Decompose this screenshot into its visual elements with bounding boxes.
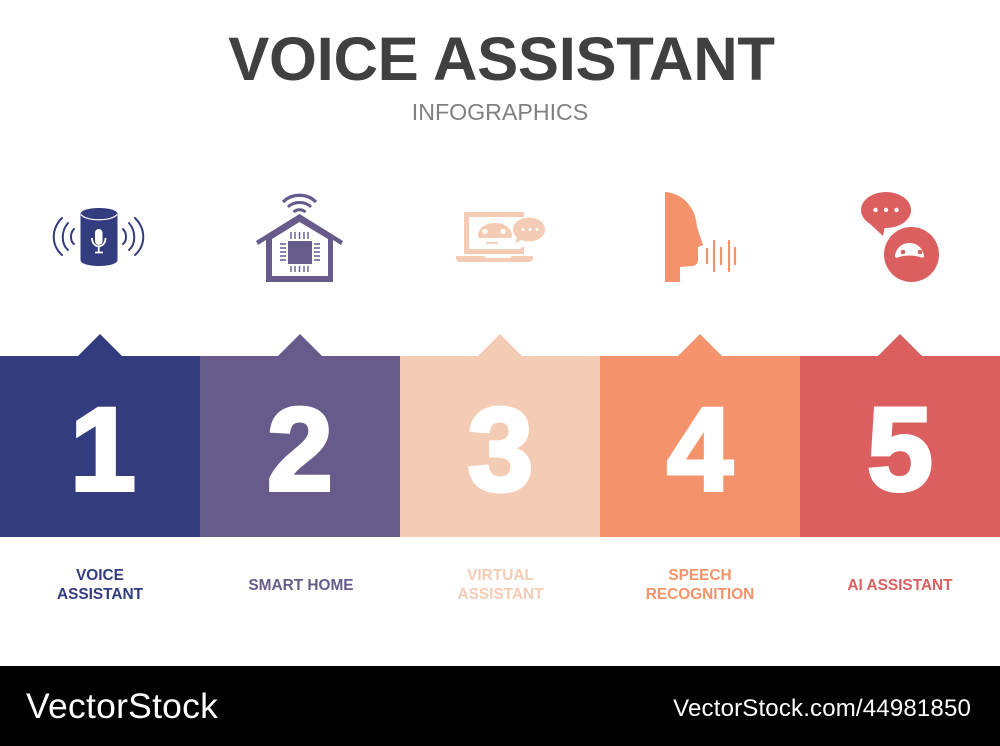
label 5: AI ASSISTANT <box>847 576 953 594</box>
panel 5 <box>800 334 1000 537</box>
icon: speaking head <box>665 192 735 282</box>
icon: laptop with virtual assistant <box>456 212 546 262</box>
icon: AI assistant chat <box>861 192 939 282</box>
label 2: SMART HOME <box>248 576 354 594</box>
icon: smart speaker <box>54 208 143 266</box>
panel 2 <box>200 334 400 537</box>
footer logo: VectorStock <box>26 686 218 726</box>
subtitle: INFOGRAPHICS <box>412 99 588 125</box>
title: VOICE ASSISTANT <box>228 25 775 94</box>
panel 4: 4 <box>667 384 733 516</box>
label 3: ASSISTANT <box>457 586 544 602</box>
panel 5: 5 <box>867 384 933 516</box>
panel 2: 2 <box>267 384 333 516</box>
footer url: VectorStock.com/44981850 <box>673 695 971 722</box>
label 3 <box>457 567 544 602</box>
label 4: SPEECH <box>668 567 732 584</box>
label 1: VOICE <box>76 567 124 584</box>
footer bar <box>0 666 1000 746</box>
panel 1 <box>0 334 200 537</box>
panel 3: 3 <box>468 384 533 516</box>
label 4: RECOGNITION <box>646 586 754 602</box>
panel 4 <box>600 334 800 537</box>
label 1: ASSISTANT <box>57 586 143 602</box>
panel 3 <box>400 334 600 537</box>
label 3: VIRTUAL <box>467 567 534 584</box>
icon: smart home chip <box>256 195 343 282</box>
label 4 <box>646 567 754 602</box>
label 1 <box>57 567 143 602</box>
panel 1: 1 <box>70 384 136 516</box>
